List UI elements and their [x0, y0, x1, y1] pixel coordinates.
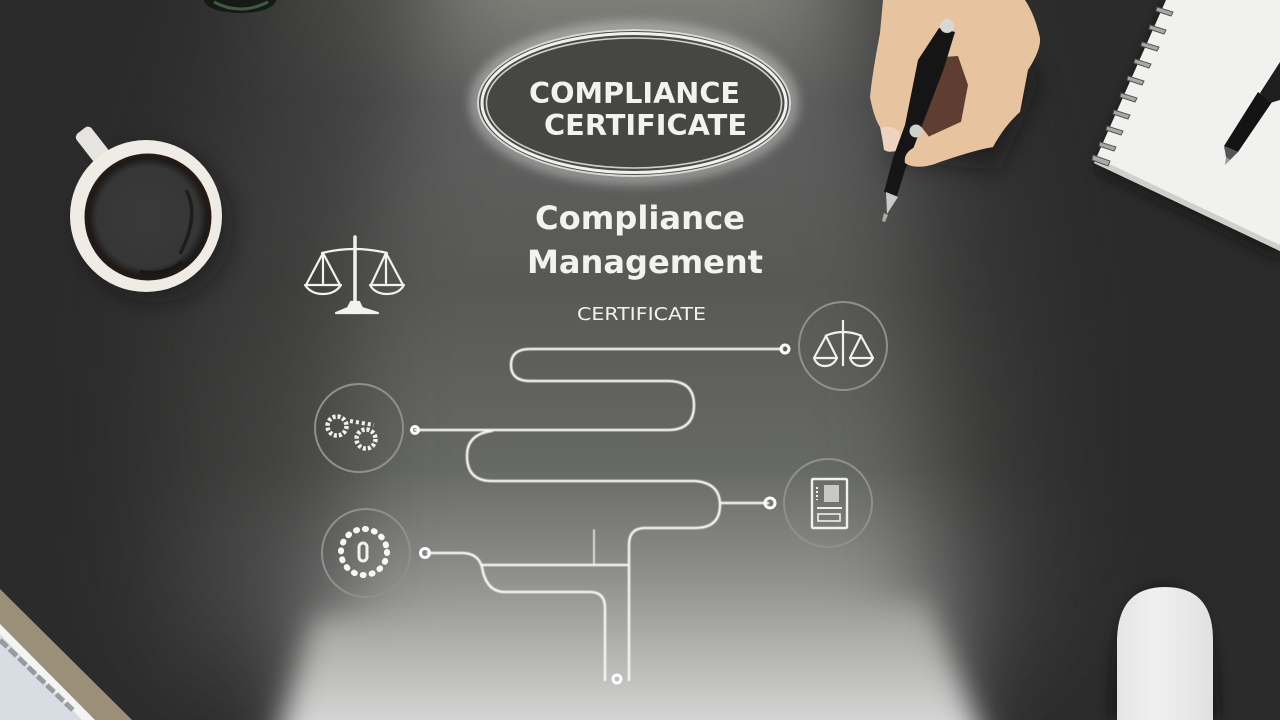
coffee cup — [70, 125, 232, 302]
badge text line 2: CERTIFICATE — [544, 109, 747, 142]
notebook rings — [1092, 7, 1173, 166]
icon circle: scales — [799, 302, 887, 390]
heading: Compliance — [535, 199, 745, 237]
icon circle: lock ring — [322, 509, 410, 597]
badge: compliance certificate oval — [476, 28, 792, 178]
desk background — [136, 0, 1064, 720]
pen — [882, 19, 955, 222]
spiral notebook — [1092, 0, 1280, 262]
heading: Management — [527, 243, 763, 281]
connector nodes — [412, 345, 789, 683]
laptop corner — [0, 589, 132, 720]
flow connector lines — [415, 349, 782, 680]
hand — [870, 0, 1040, 166]
badge text line 1: COMPLIANCE — [529, 77, 740, 110]
hand holding pen — [870, 0, 1040, 222]
computer mouse — [1110, 585, 1220, 720]
icon circle: gears — [315, 384, 403, 472]
heading — [527, 199, 763, 281]
object: top edge plant pot — [204, 0, 276, 13]
shadow between fingers — [920, 56, 968, 138]
fingernail — [881, 127, 902, 152]
icon circle: document — [784, 459, 872, 547]
icon: standalone scales of justice — [305, 237, 404, 313]
pen on notebook — [1224, 62, 1280, 165]
subheading: CERTIFICATE — [577, 304, 706, 325]
thumb over pen — [905, 120, 993, 167]
